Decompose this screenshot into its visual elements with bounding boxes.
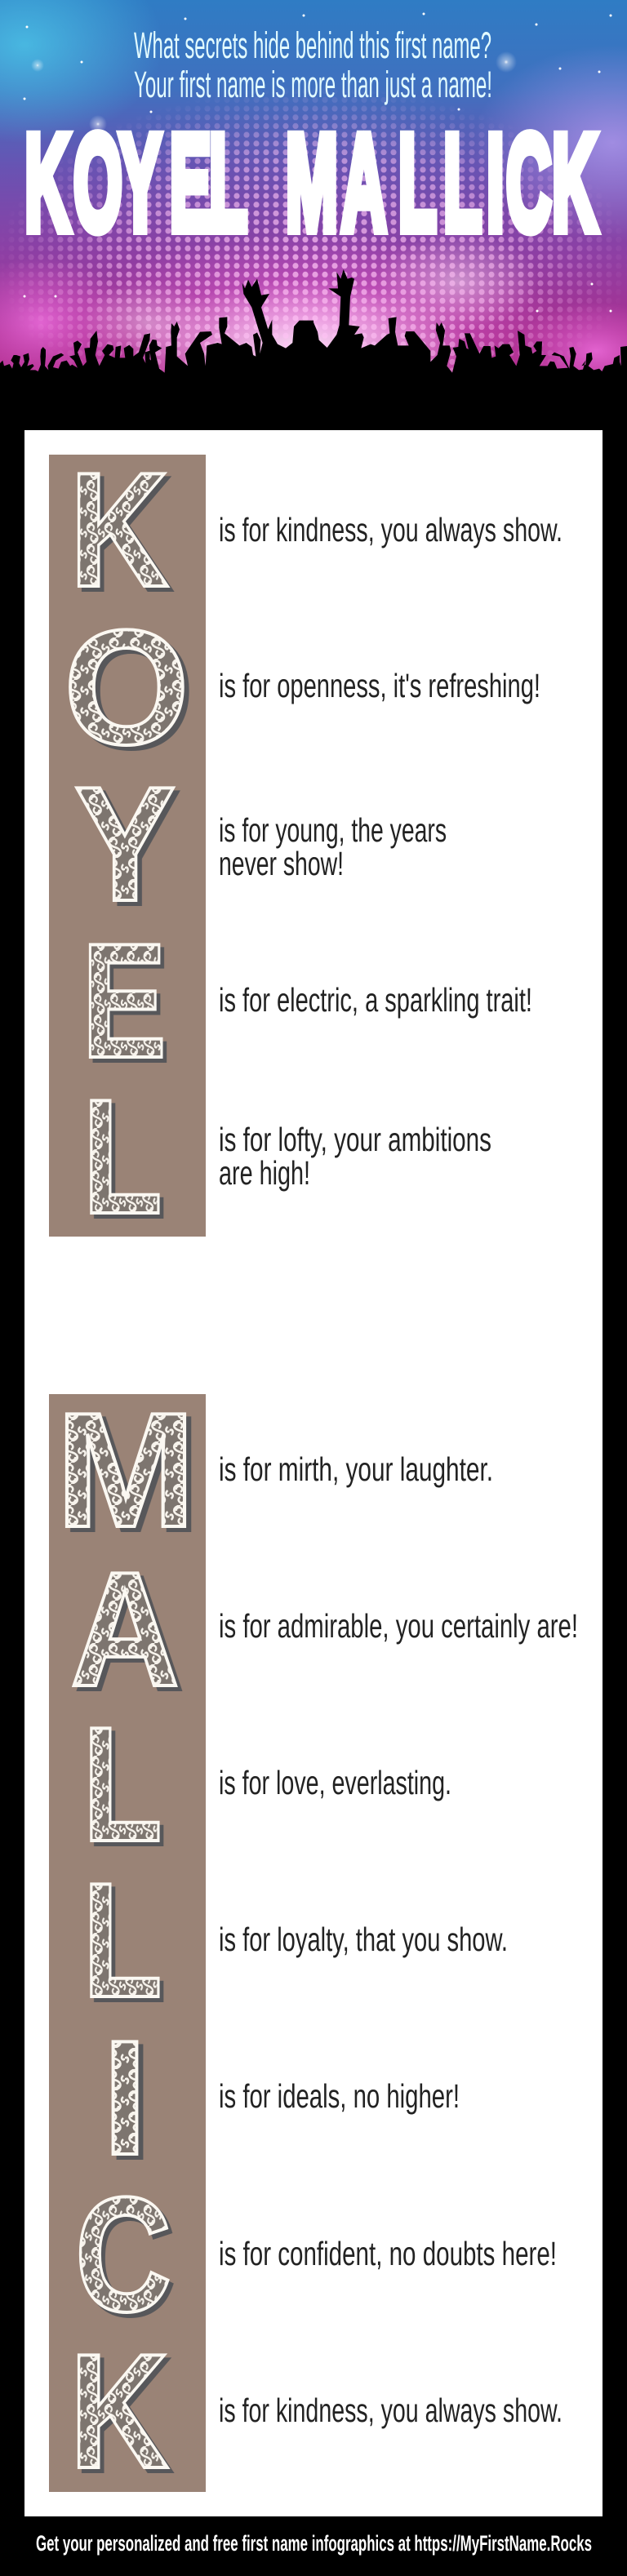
line: L: are high! [219, 1154, 310, 1192]
crowd silhouette [0, 269, 627, 433]
panel: first name KOYEL [49, 439, 563, 1248]
letter column: KOYEL [49, 439, 206, 1248]
line: Y: never show! [219, 845, 344, 882]
line: Y: is for young, the years [219, 811, 447, 849]
line: L: is for love, everlasting. [219, 1764, 451, 1801]
panel: last name MALLICK [49, 1379, 578, 2503]
header question text [134, 24, 492, 105]
line: Y [219, 811, 447, 882]
letter L: L [82, 1850, 162, 2032]
letter E: E [82, 910, 167, 1092]
letter C: C [75, 2162, 171, 2346]
letter K: K [69, 2321, 169, 2503]
letter K: K [69, 439, 169, 621]
letter column: MALLICK [49, 1379, 206, 2503]
line: L: is for lofty, your ambitions [219, 1121, 491, 1158]
white content panel [24, 430, 603, 2516]
line: L [219, 1121, 491, 1192]
header banner [0, 0, 627, 373]
letter M: M [56, 1379, 196, 1561]
letter I: I [102, 2007, 148, 2189]
letter Y: Y [74, 753, 176, 935]
letter A: A [70, 1538, 180, 1720]
letter L: L [82, 1694, 162, 1876]
title: Koyel Mallick: KOYEL MALLICK [24, 108, 597, 259]
line: L: is for loyalty, that you show. [219, 1921, 508, 1958]
line: I: is for ideals, no higher! [219, 2077, 460, 2115]
letter L: L [82, 1066, 162, 1248]
letter O: O [64, 597, 189, 779]
line: M: is for mirth, your laughter. [219, 1450, 493, 1488]
